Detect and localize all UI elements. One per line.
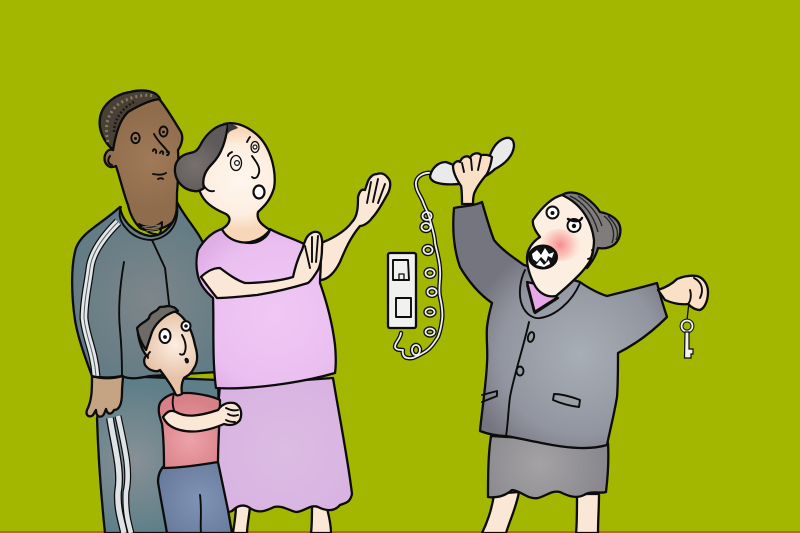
handset	[430, 138, 514, 184]
figure: man	[72, 90, 222, 533]
landlady neck and blouse	[527, 282, 558, 313]
landlady collar	[520, 270, 580, 318]
landlady legs	[482, 492, 599, 533]
woman legs	[233, 505, 331, 533]
boy hair	[137, 306, 178, 350]
man hand	[87, 376, 123, 417]
woman skirt	[218, 378, 352, 512]
man jacket	[72, 202, 218, 378]
boy trousers	[158, 462, 232, 533]
boy face	[148, 321, 190, 362]
woman head	[200, 123, 275, 242]
figure: angry landlady	[453, 153, 708, 533]
bottom stripe	[0, 531, 800, 533]
landlady skirt	[488, 436, 608, 498]
man t-shirt collar	[139, 222, 162, 234]
woman blouse	[196, 229, 336, 388]
landlady face	[546, 206, 593, 259]
woman far arm	[318, 173, 390, 280]
boy head	[138, 311, 197, 395]
landlady jacket	[453, 202, 667, 448]
landlady lowered hand	[658, 276, 708, 310]
wall telephone	[388, 138, 514, 358]
landlady mouth	[529, 246, 557, 268]
woman hair	[175, 124, 238, 191]
man trousers	[97, 376, 222, 533]
figure: woman	[175, 123, 390, 533]
boy arm and hand	[163, 403, 241, 432]
woman face	[203, 137, 264, 198]
figure: boy	[137, 306, 241, 533]
phone cord	[395, 173, 442, 358]
man hair	[100, 90, 160, 150]
man face	[108, 126, 169, 179]
landlady jacket details	[482, 322, 580, 436]
key	[682, 302, 693, 358]
landlady hair	[562, 193, 620, 268]
man neck and head	[105, 96, 182, 230]
landlady raised hand	[453, 153, 492, 204]
boy shirt	[159, 393, 220, 468]
woman near arm and hand	[201, 232, 322, 298]
wall unit	[388, 253, 416, 328]
landlady head	[527, 194, 599, 296]
